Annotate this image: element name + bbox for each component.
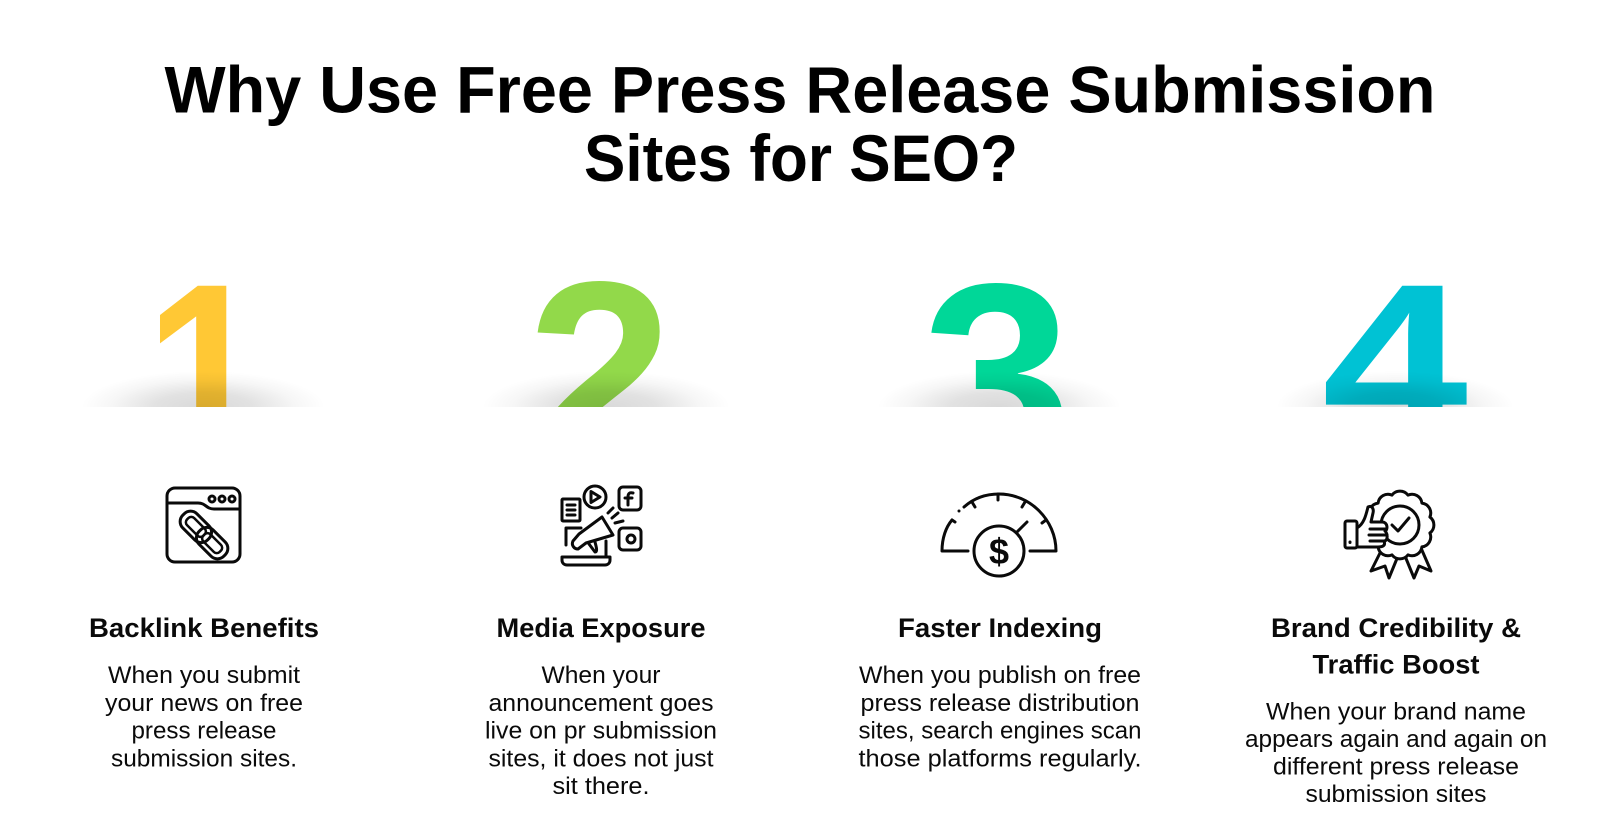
heading: backlink benefits: Backlink Benefits xyxy=(89,613,319,643)
title: Why Use Free Press Release Submission xyxy=(164,52,1436,126)
number 3: 3 xyxy=(922,229,1072,522)
number 4 xyxy=(1304,286,1486,407)
text block: backlink benefits: When you submit xyxy=(108,662,300,689)
text block: brand credibility: When your brand name xyxy=(1266,698,1526,726)
heading: faster indexing: Faster Indexing xyxy=(898,613,1102,643)
heading: brand credibility and traffic boost: Brand Credibility & xyxy=(1271,613,1521,643)
text block: backlink benefits: your news on free xyxy=(105,690,303,717)
panel: faster indexing xyxy=(858,613,1142,772)
text block: media exposure: sites, it does not just xyxy=(488,746,714,772)
number 2 xyxy=(512,281,700,407)
text block: brand credibility: different press release xyxy=(1273,754,1519,780)
title: Sites for SEO? xyxy=(584,121,1018,195)
text block: faster indexing: sites, search engines scan xyxy=(858,718,1142,744)
number 3 xyxy=(906,283,1092,407)
icon: speedometer with dollar: $ xyxy=(989,531,1009,572)
panel: brand credibility and traffic boost xyxy=(1245,613,1547,808)
number 4: 4 xyxy=(1322,239,1468,481)
text block: backlink benefits: press release xyxy=(132,718,276,744)
text block: brand credibility: appears again and again on xyxy=(1245,726,1547,753)
text block: faster indexing: those platforms regularly. xyxy=(858,746,1142,772)
text block: backlink benefits: submission sites. xyxy=(111,746,297,772)
text block: faster indexing: press release distribution xyxy=(860,690,1140,717)
heading: brand credibility and traffic boost xyxy=(1271,613,1521,680)
panel: numerals row xyxy=(110,281,1486,407)
text block: media exposure: When your xyxy=(542,662,660,689)
icon: speedometer with dollar xyxy=(942,494,1056,576)
text block: media exposure: announcement goes xyxy=(488,690,714,717)
text block: brand credibility: submission sites xyxy=(1306,781,1486,808)
text block: faster indexing: When you publish on free xyxy=(859,662,1141,689)
heading: media exposure: Media Exposure xyxy=(496,613,706,643)
number 1: 1 xyxy=(145,229,267,522)
panel: media exposure xyxy=(485,613,717,800)
text block: media exposure: sit there. xyxy=(552,773,650,800)
text block: backlink benefits xyxy=(105,662,303,772)
heading: brand credibility and traffic boost: Traffic Boost xyxy=(1312,650,1480,680)
icon: megaphone with social media xyxy=(562,486,641,565)
panel: backlink benefits xyxy=(89,613,319,772)
text block: media exposure xyxy=(485,662,717,800)
title xyxy=(164,52,1436,195)
icon: award rosette with thumbs up xyxy=(1345,491,1434,578)
number 2: 2 xyxy=(527,227,673,520)
number 1 xyxy=(110,286,296,407)
icon: browser window with chain link xyxy=(167,488,240,563)
text block: faster indexing xyxy=(858,662,1142,772)
text block: brand credibility xyxy=(1245,698,1547,808)
text block: media exposure: live on pr submission xyxy=(485,718,717,744)
